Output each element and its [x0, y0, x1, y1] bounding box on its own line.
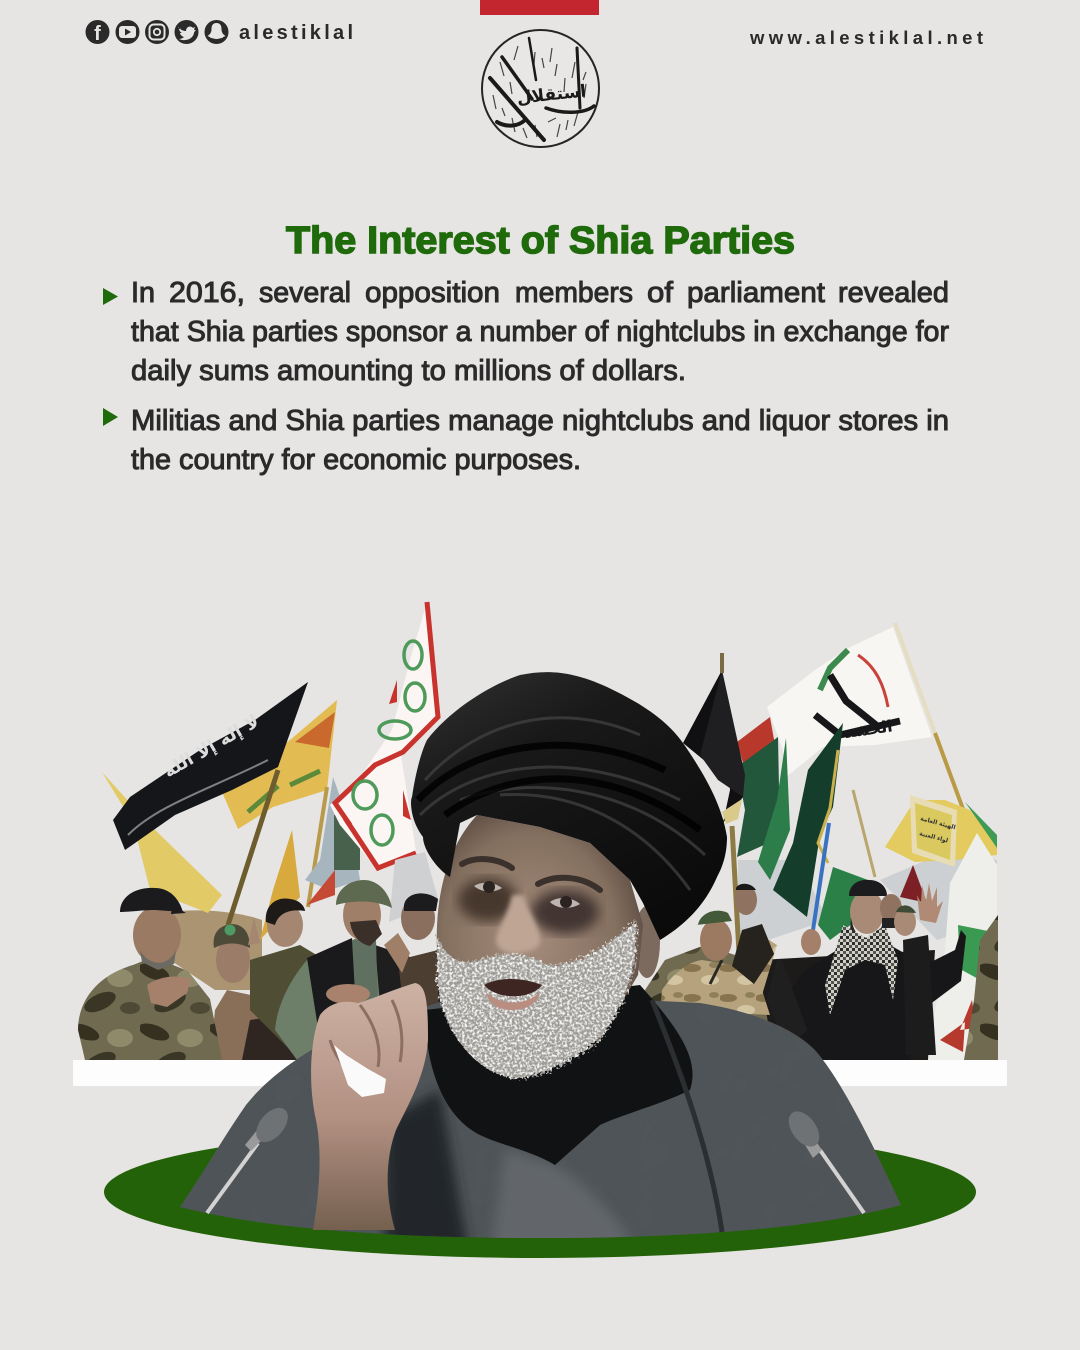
robe fold [652, 1000, 722, 1232]
red triangle [900, 865, 927, 903]
main figure [180, 672, 901, 1260]
black flag: لا إله إلا الله [160, 711, 263, 782]
website: www.alestiklal.net [749, 27, 983, 48]
man 5 black cap [384, 893, 438, 1006]
right microphone [783, 1106, 864, 1213]
beard [437, 920, 637, 1079]
blue pole [813, 823, 829, 930]
poles [730, 622, 965, 951]
icon: youtube [116, 20, 140, 44]
small yellow flag [260, 830, 300, 940]
paragraph 1 [131, 277, 949, 387]
paragraph 2 [131, 405, 949, 476]
man 1 camouflage [78, 888, 222, 1060]
ear [634, 906, 660, 978]
ornate white flag [330, 602, 438, 870]
white band [73, 1060, 1007, 1086]
red flag [737, 717, 775, 763]
hand shadow on robe [385, 1090, 470, 1260]
paragraph 1: members [515, 277, 633, 309]
green flag [737, 737, 780, 857]
raised hand [311, 983, 428, 1230]
dark green flag [773, 723, 843, 917]
crowd left: men [78, 880, 438, 1060]
logo: calligraphic seal: استقلال [516, 81, 587, 109]
green small flags [818, 867, 868, 940]
icon: snapchat [204, 20, 228, 44]
dark crowd underlay [292, 972, 440, 1060]
yellow pennant [102, 772, 222, 913]
title: The Interest of Shia Parties [286, 220, 795, 262]
white flag [767, 627, 932, 778]
black flag [113, 682, 308, 850]
left microphone [207, 1102, 294, 1213]
paragraph 1: opposition [365, 277, 500, 309]
eye sockets and cheeks [458, 859, 600, 934]
crowd right: flags [683, 622, 997, 1060]
robe fold 2 [490, 1150, 640, 1260]
man 7 in black with scarf [801, 880, 966, 1014]
crowd right: men [645, 880, 998, 1060]
camouflage back men [645, 946, 768, 1021]
red top tab [480, 0, 599, 15]
yellow cloth [885, 800, 997, 862]
paragraph 1: In [131, 277, 155, 309]
green ellipse base [104, 1126, 976, 1258]
paragraph 1: 2016, [169, 277, 245, 309]
placard: الهيئة العامة [919, 815, 956, 831]
pole [308, 787, 327, 907]
handle: alestiklal [239, 22, 353, 44]
tissue [334, 1045, 386, 1097]
robe [180, 1000, 901, 1238]
paragraph 1: parliament [687, 277, 825, 309]
bullet marker 2 [103, 408, 118, 426]
man 4 vest [275, 880, 410, 1060]
man 3 young man [248, 898, 316, 1049]
paragraph 1: revealed [838, 277, 949, 309]
robe shading [385, 1090, 640, 1260]
white flag: الحشد [843, 716, 894, 742]
face [437, 815, 643, 1060]
paragraph 2: the country for economic purposes. [131, 444, 581, 476]
bullet 1 [103, 277, 949, 387]
placard [910, 795, 957, 867]
pale sky [738, 859, 997, 940]
dark crowd underlay [762, 950, 935, 1060]
black flag [683, 670, 743, 823]
man with green cap [660, 911, 777, 1015]
white flag far right [927, 833, 997, 1060]
icon: instagram [145, 20, 169, 44]
bullet 2 [103, 405, 949, 476]
turban [411, 672, 727, 940]
social icons and handle [86, 20, 353, 45]
bearded man behind [732, 884, 774, 984]
paragraph 2: Militias and Shia parties manage nightclubs and liquor stores in [131, 405, 949, 437]
logo: calligraphic seal [482, 30, 599, 147]
paragraph 1: daily sums amounting to millions of dollars. [131, 355, 686, 387]
icon: twitter [174, 20, 198, 44]
man 2 brown shirt [214, 924, 259, 1060]
yellow banner [222, 700, 337, 829]
placard: لواء العتبة [918, 830, 949, 845]
inner collar shadow [425, 985, 693, 1165]
mouth [484, 979, 542, 1010]
nose [496, 895, 540, 953]
black flag pole [228, 770, 278, 925]
crowd left: flags [102, 602, 440, 1060]
grey-blue flag [305, 777, 360, 905]
back men right [880, 894, 936, 1055]
icon: facebook: f [94, 23, 101, 45]
bullet marker 1 [103, 288, 118, 305]
paragraph 1: of [647, 277, 674, 309]
paragraph 1: that Shia parties sponsor a number of nightclubs in exchange for [131, 316, 949, 348]
icon: facebook [86, 20, 110, 45]
faint flag behind men [389, 852, 439, 922]
camouflage edge [964, 915, 998, 1060]
paragraph 1: several [259, 277, 351, 309]
desert backdrop [170, 910, 262, 990]
